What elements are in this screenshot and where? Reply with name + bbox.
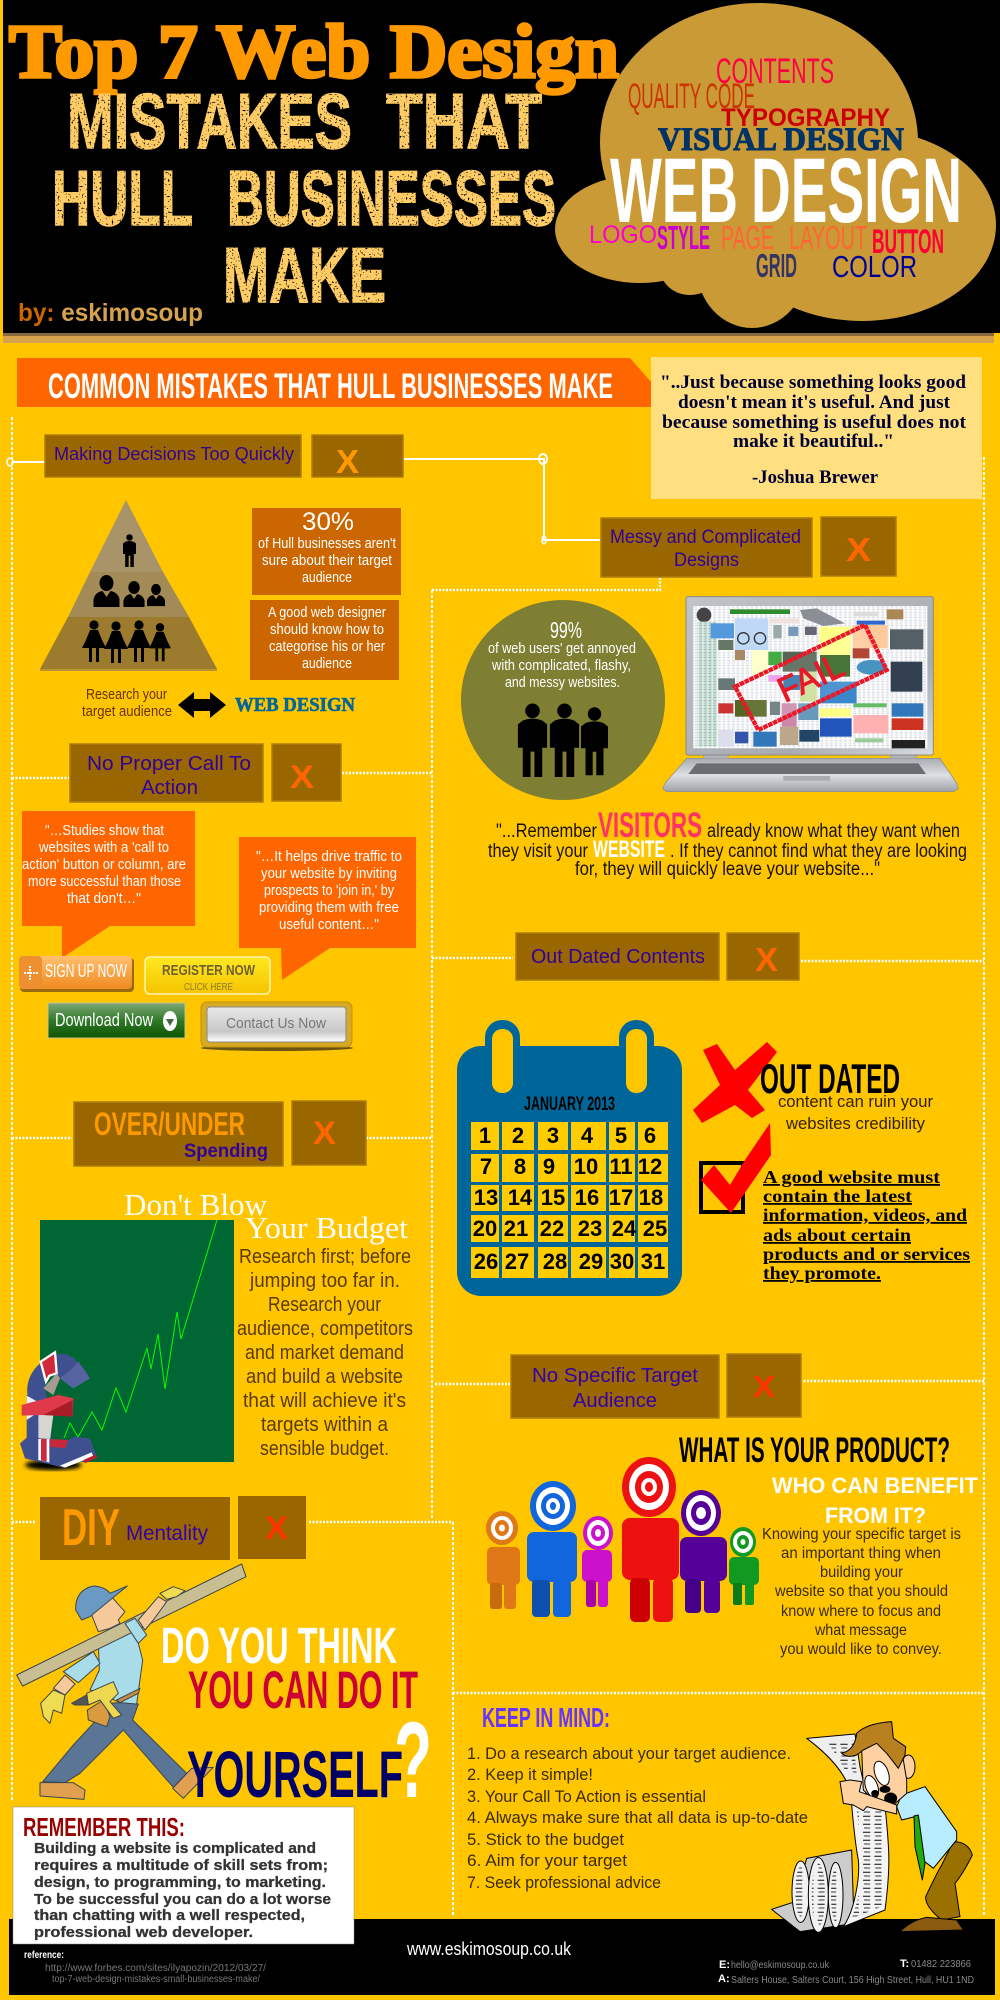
text: research first: and market demand	[245, 1342, 404, 1364]
list: 1. Do a research about your target audience.	[467, 1744, 791, 1763]
base	[20, 1435, 97, 1468]
text: good website must: ads about certain	[763, 1225, 911, 1245]
calendar numbers: 5	[615, 1123, 627, 1148]
panel: remember this: requires a multitude of skill sets from;	[34, 1857, 328, 1874]
text: knowing your specific target: building your	[820, 1564, 904, 1581]
quote box: "..Just because something looks good	[660, 372, 966, 393]
subtitle: mistakes that hull businesses make: BUSINESSES	[227, 154, 556, 242]
text: good website must: A good website must	[763, 1167, 940, 1187]
heading: making decisions too quickly: Making Decisions Too Quickly	[54, 444, 294, 464]
quote: visitors	[488, 806, 967, 880]
paper pile	[772, 1850, 854, 1932]
callout: drive traffic: your website by inviting	[261, 865, 397, 882]
footer: top-7-web-design-mistakes-small-businesses-make/	[52, 1974, 260, 1985]
footer	[9, 1919, 995, 1995]
connector lines	[7, 417, 984, 1917]
heading: making decisions too quickly	[45, 435, 403, 480]
heading: no proper call to action: X	[290, 759, 315, 795]
button: download now	[48, 1003, 185, 1038]
figure: green	[729, 1527, 759, 1605]
calendar numbers: 14	[508, 1185, 533, 1210]
footer: T:	[900, 1958, 909, 1970]
cloud shape	[555, 3, 996, 328]
quote: visitors: "...Remember	[496, 821, 598, 842]
panel: remember this: than chatting with a well respected,	[34, 1907, 305, 1924]
quote: visitors: WEBSITE	[593, 836, 665, 863]
list	[467, 1744, 808, 1892]
cloud words: COLOR	[832, 249, 917, 284]
callout: studies show: "…Studies show that	[45, 822, 165, 839]
calendar numbers: 28	[543, 1249, 567, 1274]
heading: don't blow your budget: Your Budget	[245, 1210, 408, 1245]
slogan: do you think you can do it yourself: DO YOU THINK	[161, 1617, 397, 1674]
lower arm	[41, 1652, 100, 1723]
calendar numbers: 17	[609, 1185, 633, 1210]
heading: making decisions too quickly: X	[336, 443, 359, 480]
text: research first: targets within a	[261, 1414, 389, 1436]
heading: don't blow your budget: Don't Blow	[124, 1187, 268, 1222]
button: contact us now: Contact Us Now	[226, 1015, 326, 1032]
figure: purple	[680, 1490, 727, 1613]
cloud words: PAGE	[721, 219, 774, 256]
heading: no specific target audience	[511, 1354, 801, 1418]
callout: drive traffic: prospects to 'join in,' by	[264, 882, 394, 899]
subtitle: mistakes that hull businesses make: MISTAKES	[67, 77, 352, 165]
calendar rings	[485, 1020, 654, 1093]
calendar numbers: 24	[612, 1216, 637, 1241]
text: knowing your specific target: know where to focus and	[781, 1603, 941, 1620]
heading: no specific target audience: No Specific Target	[532, 1365, 698, 1387]
heading: no proper call to action: Action	[141, 777, 198, 799]
quote: visitors: for, they will quickly leave your website..."	[575, 859, 880, 880]
button: download now: Download Now	[55, 1010, 154, 1030]
calendar: JANUARY 2013	[524, 1094, 615, 1115]
calendar numbers: 7	[480, 1154, 492, 1179]
callout: studies show: websites with a 'call to	[38, 839, 169, 856]
text: good web designer: should know how to	[270, 621, 384, 638]
subtitle: mistakes that hull businesses make: HULL	[52, 154, 193, 242]
panel: remember this: REMEMBER THIS:	[23, 1812, 185, 1842]
list: 5. Stick to the budget	[467, 1830, 624, 1849]
quote box	[651, 357, 982, 499]
text: good website must	[763, 1167, 970, 1283]
heading: messy and complicated designs: X	[846, 531, 871, 568]
text: knowing your specific target	[762, 1526, 961, 1658]
footer: Salters House, Salters Court, 156 High Street, Hull, HU1 1ND	[731, 1975, 974, 1986]
header band	[3, 0, 1000, 343]
heading: no proper call to action	[70, 744, 341, 802]
calendar numbers: 2	[512, 1123, 524, 1148]
calendar numbers: 29	[579, 1249, 603, 1274]
shirt	[897, 1787, 957, 1868]
calendar numbers: 21	[504, 1216, 528, 1241]
stat: 30 percent	[252, 508, 401, 595]
text: good web designer: audience	[302, 655, 352, 672]
text: research first: that will achieve it's	[243, 1390, 406, 1412]
panel: keep in mind	[467, 1702, 808, 1892]
callout: studies show: more successful than those	[28, 873, 181, 890]
slogan: do you think you can do it yourself	[161, 1617, 432, 1820]
torso	[90, 1625, 143, 1704]
panel: remember this	[13, 1807, 354, 1944]
byline: by eskimosoup: by: eskimosoup	[18, 299, 203, 327]
text: good website must: products and or services	[763, 1244, 970, 1264]
footer: www.eskimosoup.co.uk	[406, 1939, 572, 1959]
trousers	[926, 1842, 972, 1920]
quote box: make it beautiful.."	[733, 431, 894, 452]
boots	[40, 1783, 85, 1799]
figures with target heads	[486, 1457, 759, 1622]
callout: drive traffic: providing them with free	[259, 899, 399, 916]
cloud words: LAYOUT	[789, 219, 867, 256]
heading: out dated contents: X	[755, 941, 778, 978]
heading: messy and complicated designs	[601, 517, 896, 577]
tie	[914, 1815, 925, 1880]
text: good web designer: categorise his or her	[269, 638, 385, 655]
long paper scroll	[807, 1734, 889, 1927]
footer: E:	[719, 1959, 730, 1971]
panel: keep in mind: KEEP IN MIND:	[482, 1702, 610, 1733]
jeans	[43, 1703, 187, 1787]
calendar numbers: 4	[581, 1123, 594, 1148]
raised arm	[125, 1587, 185, 1643]
pyramid of audience	[40, 500, 217, 671]
calendar numbers: 22	[540, 1216, 564, 1241]
list: 2. Keep it simple!	[467, 1765, 593, 1784]
calendar numbers: 12	[638, 1154, 662, 1179]
cloud words: CONTENTS	[716, 52, 834, 91]
text: knowing your specific target: an important thing when	[781, 1545, 941, 1562]
text: good website must: they promote.	[763, 1263, 881, 1283]
quote box: -Joshua Brewer	[752, 467, 879, 488]
figure: orange	[486, 1511, 520, 1609]
calendar numbers: 1	[479, 1123, 491, 1148]
callout: drive traffic: "…It helps drive traffic to	[256, 848, 402, 865]
calendar numbers: 25	[643, 1216, 667, 1241]
heading: messy and complicated designs: Designs	[674, 550, 739, 571]
heading: out dated contents	[516, 933, 799, 980]
shoe	[900, 1917, 963, 1932]
quote box: doesn't mean it's useful. And just	[678, 392, 951, 413]
tool belt and drill	[72, 1682, 140, 1727]
hook	[27, 1354, 90, 1400]
illustration: man reading long paper	[772, 1722, 972, 1932]
text: research first: Research first; before	[239, 1246, 411, 1268]
cloud words	[589, 52, 962, 284]
quote: visitors: already know what they want when	[707, 821, 960, 842]
button: register now	[145, 957, 270, 994]
button: sign up now	[19, 956, 134, 992]
calendar numbers: 23	[578, 1216, 602, 1241]
heading: diy mentality: X	[265, 1510, 289, 1546]
head and cap	[76, 1586, 127, 1632]
text: research first: audience, competitors	[237, 1318, 413, 1340]
calendar numbers: 18	[639, 1185, 663, 1210]
calendar numbers: 3	[547, 1123, 559, 1148]
text: good website must: information, videos, and	[763, 1205, 967, 1225]
button: contact us now	[201, 1002, 353, 1051]
cloud words: STYLE	[657, 219, 710, 256]
crossbar	[22, 1395, 73, 1417]
calendar numbers: 27	[505, 1249, 529, 1274]
banner: common mistakes	[17, 358, 660, 407]
heading: out dated contents: Out Dated Contents	[531, 946, 705, 968]
calendar numbers: 8	[514, 1154, 526, 1179]
banner: common mistakes: COMMON MISTAKES THAT HULL BUSINESSES MAKE	[48, 367, 613, 406]
stat: 30 percent: of Hull businesses aren't	[258, 535, 397, 552]
text: out dated	[760, 1055, 933, 1133]
subtitle: mistakes that hull businesses make	[52, 77, 556, 319]
text: knowing your specific target: website so that you should	[774, 1583, 948, 1600]
slogan: do you think you can do it yourself: ?	[394, 1699, 432, 1820]
website collage	[697, 608, 925, 748]
calendar numbers: 13	[474, 1185, 498, 1210]
calendar numbers: 16	[575, 1185, 599, 1210]
heading: who can benefit: WHO CAN BENEFIT	[772, 1473, 979, 1498]
text: research first: Research your	[268, 1294, 381, 1316]
heading: over under spending	[74, 1101, 366, 1166]
stat: 30 percent: 30%	[302, 508, 354, 536]
cloud words: QUALITY CODE	[628, 77, 755, 116]
research your target audience	[82, 686, 356, 720]
slogan: do you think you can do it yourself: YOU CAN DO IT	[188, 1661, 418, 1720]
heading: who can benefit: FROM IT?	[825, 1503, 926, 1528]
laptop lid	[686, 597, 933, 755]
footer: 01482 223866	[911, 1959, 971, 1970]
research your target audience: target audience	[82, 703, 172, 720]
quote: visitors: VISITORS	[598, 806, 702, 845]
callout: studies show: action' button or column, are	[22, 856, 186, 873]
double arrow	[178, 692, 226, 718]
research your target audience: Research your	[86, 686, 167, 703]
list: 7. Seek professional advice	[467, 1873, 661, 1892]
list: 4. Always make sure that all data is up-to-date	[467, 1808, 808, 1827]
cloud words: TYPOGRAPHY	[721, 104, 890, 132]
illustration: worker carrying plank	[17, 1564, 246, 1799]
text: good web designer: A good web designer	[268, 604, 386, 621]
icon: checkbox tick	[701, 1123, 771, 1213]
word cloud	[555, 3, 996, 328]
calendar	[457, 1020, 682, 1296]
callout: drive traffic	[239, 837, 416, 980]
slogan: do you think you can do it yourself: YOURSELF	[187, 1737, 403, 1811]
cloud words: GRID	[756, 247, 797, 284]
text: knowing your specific target: what message	[814, 1622, 907, 1639]
calendar numbers	[473, 1123, 667, 1274]
text: out dated: OUT DATED	[760, 1055, 900, 1102]
text: good website must: contain the latest	[763, 1186, 912, 1206]
cloud words: WEB	[610, 140, 738, 242]
title: top 7 web design: Top 7 Web Design	[9, 10, 619, 94]
calendar numbers: 26	[474, 1249, 498, 1274]
quote: visitors: they visit your	[488, 841, 589, 862]
calendar numbers: 10	[574, 1154, 598, 1179]
quote box: because something is useful does not	[662, 412, 967, 433]
stat circle: 99 percent: of web users' get annoyed	[488, 640, 636, 657]
calendar numbers: 11	[609, 1154, 633, 1179]
calendar numbers: 15	[541, 1185, 565, 1210]
calendar numbers: 30	[610, 1249, 634, 1274]
laptop base	[663, 758, 958, 792]
heading: don't blow your budget	[124, 1187, 408, 1245]
list: 6. Aim for your target	[467, 1851, 627, 1870]
heading: who can benefit	[772, 1473, 979, 1528]
stat: 30 percent: audience	[302, 569, 352, 586]
hand and arm	[840, 1780, 897, 1814]
laptop with messy website	[663, 597, 958, 792]
text: out dated: content can ruin your	[778, 1092, 933, 1111]
line chart	[40, 1220, 234, 1462]
list: 3. Your Call To Action is essential	[467, 1787, 706, 1806]
callout: drive traffic: useful content…"	[279, 916, 379, 933]
panel: remember this: professional web developer.	[34, 1924, 253, 1941]
heading: over under spending: Spending	[184, 1141, 268, 1162]
heading: diy mentality	[40, 1496, 306, 1560]
stat: 30 percent: sure about their target	[262, 552, 393, 569]
text: research first: sensible budget.	[260, 1438, 389, 1460]
panel: remember this: design, to programming, to marketing.	[34, 1874, 326, 1891]
subtitle: mistakes that hull businesses make: THAT	[386, 77, 542, 165]
stat circle: 99 percent: and messy websites.	[505, 674, 620, 691]
text: out dated: websites credibility	[785, 1114, 925, 1133]
figure: magenta	[582, 1516, 613, 1607]
calendar numbers: 6	[644, 1123, 656, 1148]
cloud words: VISUAL DESIGN	[658, 122, 904, 158]
text: knowing your specific target: Knowing your specific target is	[762, 1526, 961, 1543]
button: sign up now: SIGN UP NOW	[45, 961, 127, 981]
heading: messy and complicated designs: Messy and Complicated	[610, 527, 801, 548]
text: knowing your specific target: you would like to convey.	[780, 1641, 942, 1658]
icon: big red x	[693, 1042, 777, 1123]
calendar numbers: 31	[641, 1249, 665, 1274]
figure: blue	[527, 1481, 577, 1617]
heading: over under spending: OVER/UNDER	[94, 1106, 245, 1142]
heading: no specific target audience: Audience	[573, 1390, 657, 1412]
callout: studies show: that don't…"	[67, 890, 141, 907]
cloud words: LOGO	[589, 221, 657, 249]
button: register now: REGISTER NOW	[162, 962, 256, 979]
calendar cells	[471, 1122, 668, 1278]
plank	[17, 1564, 246, 1686]
stat circle: 99 percent: with complicated, flashy,	[491, 657, 631, 674]
research your target audience: WEB DESIGN	[235, 694, 356, 716]
head	[842, 1722, 915, 1807]
button: register now: CLICK HERE	[184, 982, 233, 993]
text: research first: and build a website	[246, 1366, 403, 1388]
text: good web designer	[250, 600, 399, 680]
stat circle: 99 percent: 99%	[550, 617, 582, 643]
fail stamp: FAIL	[772, 646, 850, 710]
footer: reference:	[24, 1950, 64, 1961]
text: research first	[237, 1246, 413, 1460]
heading: no specific target audience: X	[753, 1369, 775, 1404]
stat circle: 99 percent	[461, 600, 665, 800]
stem	[27, 1395, 52, 1440]
heading: no proper call to action: No Proper Call To	[87, 753, 251, 775]
text: research first: jumping too far in.	[249, 1270, 400, 1292]
callout: studies show	[22, 811, 195, 958]
heading: over under spending: X	[313, 1115, 337, 1151]
panel: remember this: Building a website is complicated and	[34, 1840, 316, 1857]
heading: diy mentality: Mentality	[126, 1522, 208, 1545]
fail stamp	[735, 625, 887, 730]
footer: hello@eskimosoup.co.uk	[731, 1960, 830, 1971]
panel: remember this: To be successful you can do a lot worse	[34, 1891, 331, 1908]
footer: A:	[718, 1973, 730, 1985]
footer: http://www.forbes.com/sites/ilyapozin/2012/03/27/	[45, 1963, 266, 1974]
calendar numbers: 20	[473, 1216, 497, 1241]
figure: red	[622, 1457, 679, 1622]
subtitle: mistakes that hull businesses make: MAKE	[223, 231, 386, 319]
calendar numbers: 9	[543, 1154, 555, 1179]
icon: union jack pound sign	[20, 1352, 97, 1470]
heading: diy mentality: DIY	[62, 1499, 120, 1557]
